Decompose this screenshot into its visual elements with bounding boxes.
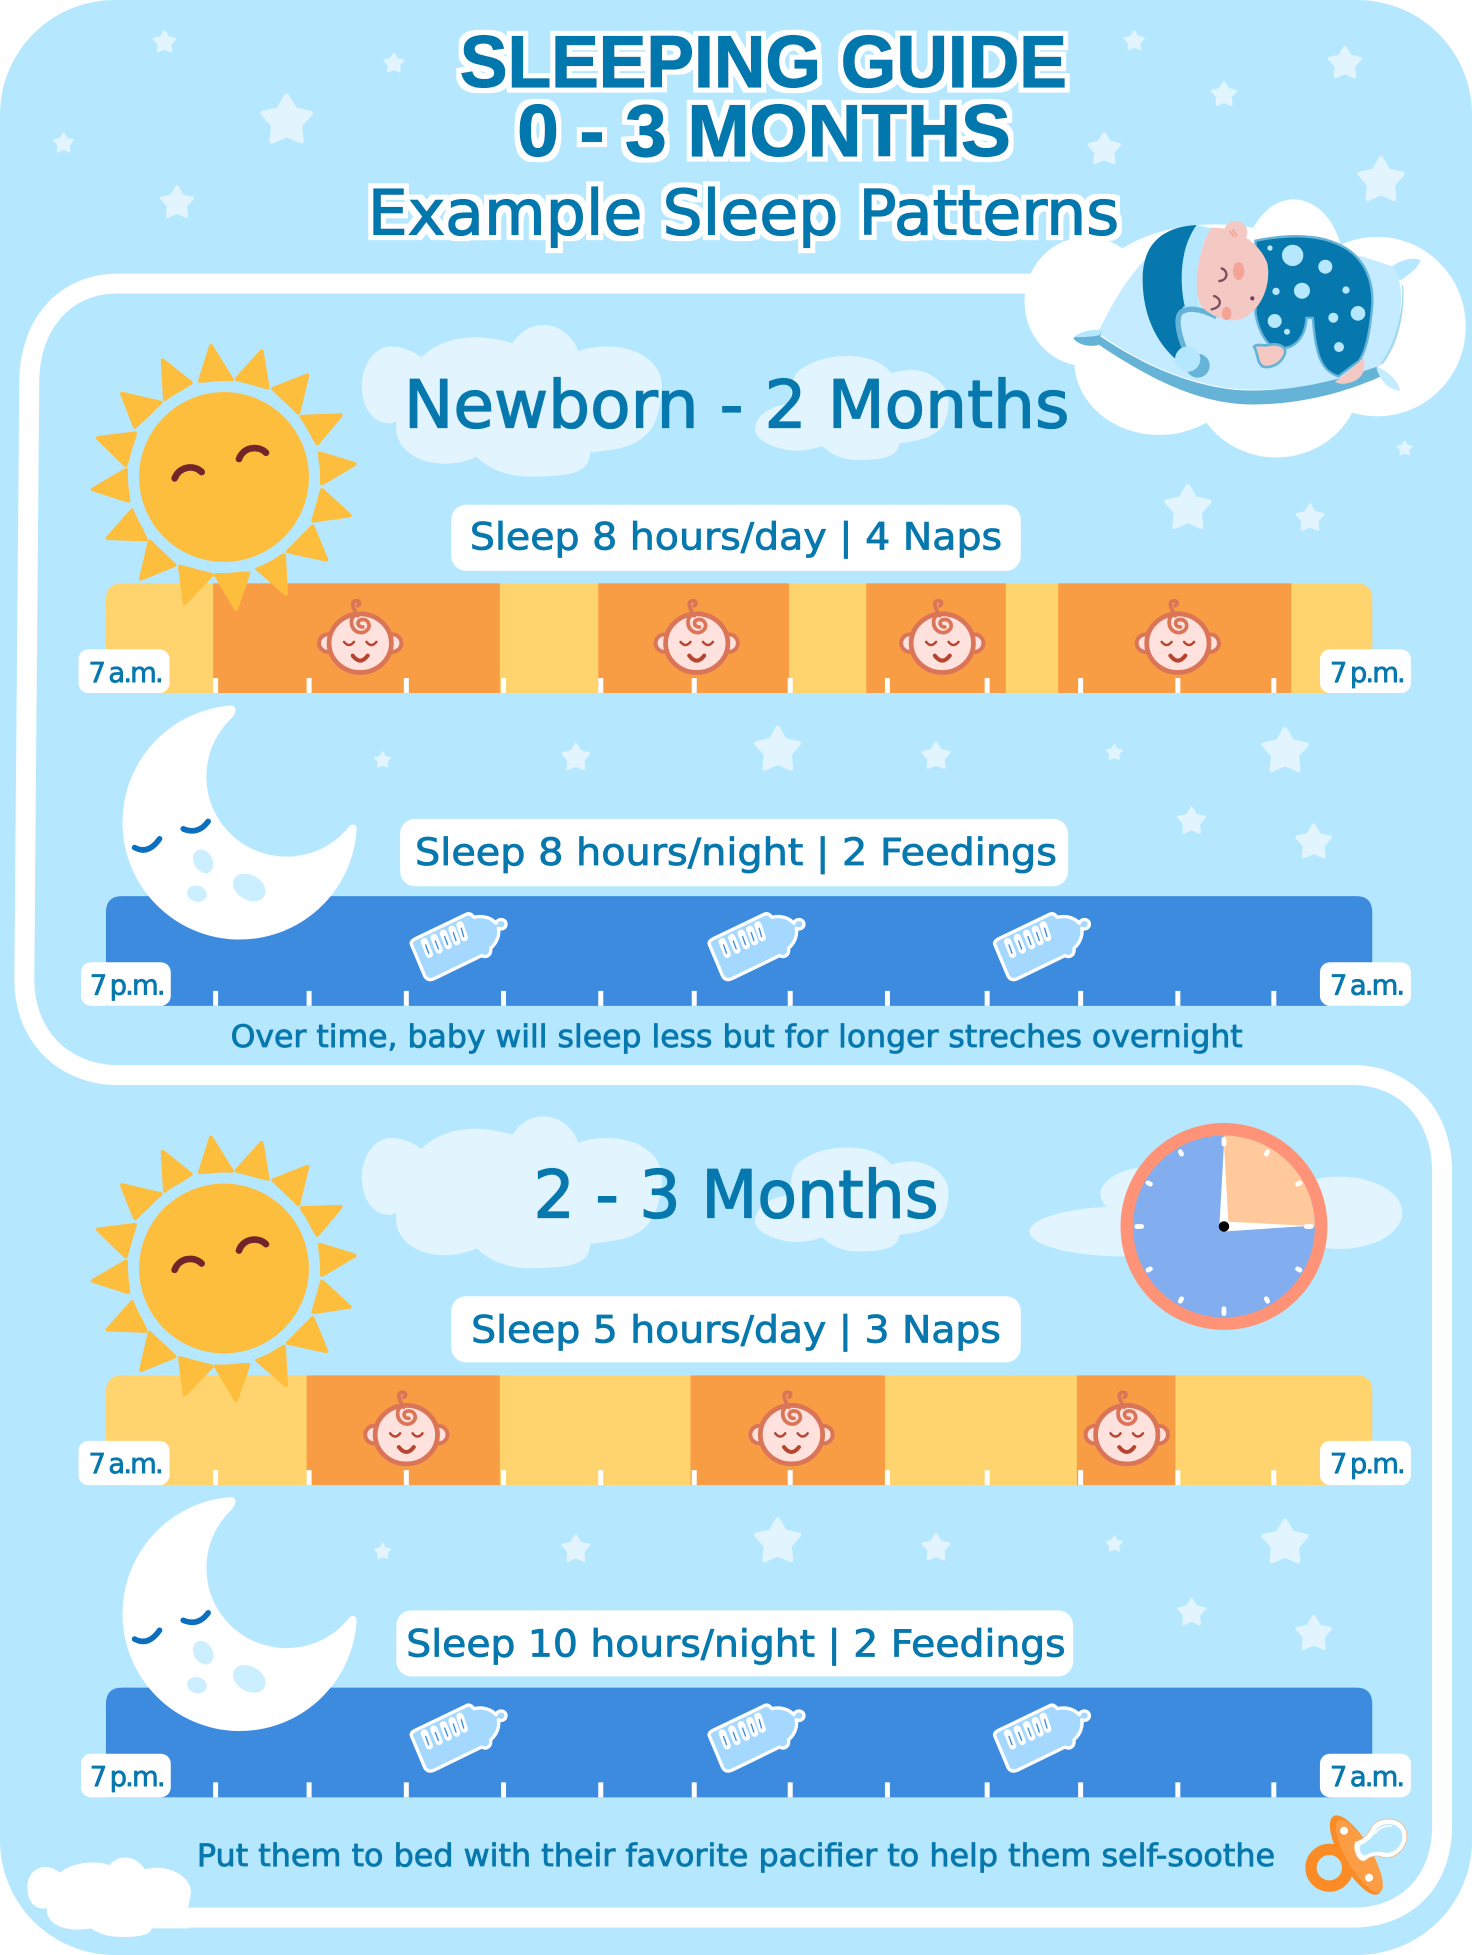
label: 7 a.m. [79, 649, 170, 693]
white cloud [1025, 199, 1466, 457]
label: 7 a.m.: 7 a.m. [88, 1449, 162, 1480]
title line 2: 0 - 3 MONTHS [517, 89, 1011, 172]
label: daytime sleep: Sleep 8 hours/day | 4 Naps [470, 515, 1002, 560]
label: night sleep [396, 1610, 1073, 1676]
label: 7 p.m. night [81, 1754, 171, 1797]
night stars [375, 728, 1330, 857]
icon: bottle 1 [411, 1705, 506, 1771]
label: 7 p.m.: 7 p.m. [1330, 658, 1404, 689]
icon: bottle 2 [709, 1705, 804, 1771]
icon: pacifier [1311, 1808, 1407, 1902]
heading: 2 - 3 Months [533, 1157, 939, 1234]
subtitle: Example Sleep Patterns [368, 176, 1119, 249]
label: night sleep: Sleep 8 hours/night | 2 Feedings [415, 830, 1057, 875]
illustration: sleeping baby on cloud [1025, 199, 1466, 457]
day bar [106, 1375, 1372, 1485]
label: 7 p.m.: 7 p.m. [1330, 1449, 1404, 1480]
icon: sleeping baby 4 [1137, 601, 1219, 672]
icon: bottle 1 [411, 914, 506, 980]
background stars [54, 31, 1412, 530]
note: Put them to bed with their favorite pacifier to help them self-soothe [197, 1838, 1275, 1874]
label: 7 p.m. [1320, 1441, 1411, 1485]
label: 7 p.m. night [81, 962, 171, 1006]
heading cloud [362, 1116, 949, 1268]
label: daytime sleep [451, 1296, 1021, 1362]
label: night sleep [400, 819, 1068, 886]
label: 7 p.m. night: 7 p.m. [90, 1762, 164, 1793]
title [368, 20, 1119, 249]
label: 7 p.m. [1320, 649, 1411, 693]
icon: sleeping baby 2 [750, 1392, 833, 1464]
icon: clock [1121, 1123, 1327, 1330]
note: Over time, baby will sleep less but for longer streches overnight [231, 1019, 1243, 1055]
label: 7 p.m. night: 7 p.m. [90, 971, 164, 1002]
icon: sun [93, 346, 355, 609]
panel: 2 to 3 months [79, 1116, 1411, 1902]
clock cloud [1030, 1167, 1402, 1256]
label: 7 a.m. night: 7 a.m. [1330, 1762, 1403, 1793]
baby on pillow [1073, 221, 1421, 404]
icon: bottle 3 [995, 914, 1089, 980]
label: 7 a.m. night [1320, 1754, 1411, 1797]
label: 7 a.m. [79, 1441, 170, 1485]
icon: sun [93, 1138, 355, 1400]
icon: sleeping baby 3 [901, 601, 983, 672]
panel: newborn to 2 months [79, 325, 1411, 1055]
icon: moon [122, 705, 357, 940]
icon: sleeping baby 1 [319, 601, 401, 672]
night stars [375, 1519, 1330, 1648]
heading: Newborn - 2 Months [404, 367, 1069, 444]
label: 7 a.m. night [1320, 962, 1411, 1006]
white cloud bottom left [27, 1858, 191, 1937]
label: daytime sleep [451, 505, 1021, 571]
icon: sleeping baby 2 [656, 601, 738, 672]
icon: bottle 2 [709, 914, 804, 980]
label: 7 a.m. night: 7 a.m. [1330, 971, 1403, 1002]
day bar [106, 583, 1372, 693]
icon: bottle 3 [995, 1705, 1089, 1771]
night bar [106, 1688, 1372, 1797]
icon: sleeping baby 1 [365, 1392, 447, 1464]
title line 1: SLEEPING GUIDE [460, 20, 1067, 103]
label: daytime sleep: Sleep 5 hours/day | 3 Naps [471, 1307, 1001, 1352]
night bar [106, 896, 1372, 1006]
heading cloud [362, 325, 949, 477]
icon: moon [122, 1497, 357, 1731]
label: 7 a.m.: 7 a.m. [88, 658, 162, 689]
label: night sleep: Sleep 10 hours/night | 2 Feedings [406, 1621, 1066, 1666]
icon: sleeping baby 3 [1086, 1392, 1168, 1464]
